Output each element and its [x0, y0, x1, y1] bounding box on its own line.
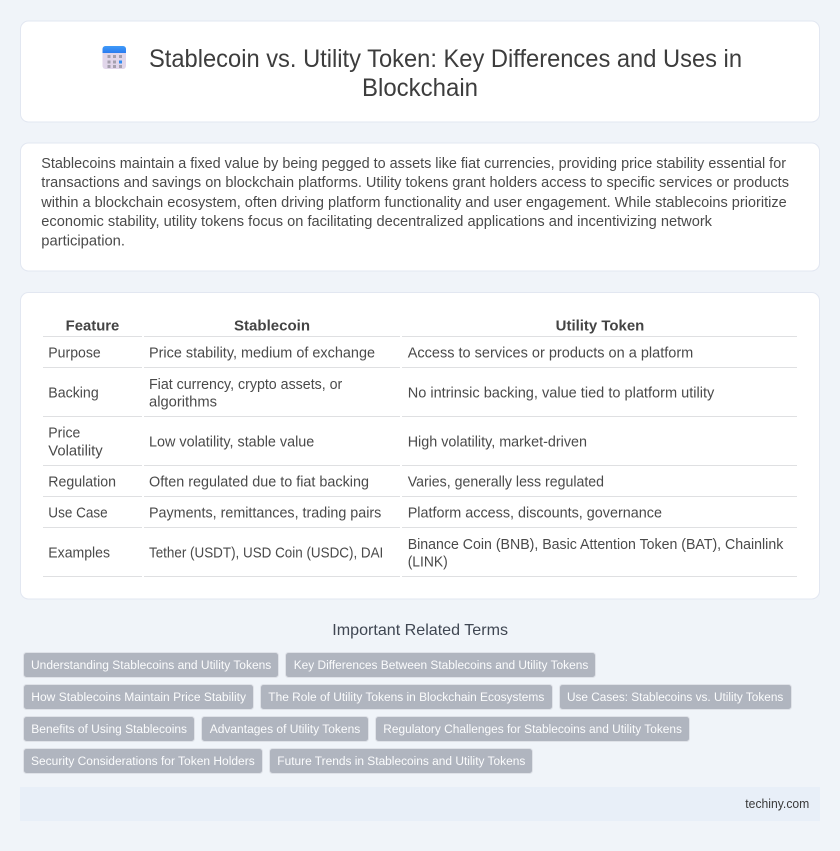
row: price volatility: Price: [48, 426, 80, 442]
row: regulation: Varies, generally less regulated: [408, 475, 604, 491]
row: backing: algorithms: [149, 395, 217, 411]
row: price volatility: [48, 426, 587, 460]
icon: calendar grid: [102, 46, 126, 69]
tag: Key Differences Between Stablecoins and Utility Tokens: [294, 658, 588, 672]
row: use case: Payments, remittances, trading pairs: [149, 506, 381, 522]
tag: [560, 684, 792, 710]
row: backing: Fiat currency, crypto assets, or: [149, 377, 342, 393]
row: regulation: Regulation: [48, 475, 116, 491]
panel: comparison table: [20, 292, 820, 599]
row: regulation: [48, 475, 604, 491]
row: price volatility: Volatility: [48, 444, 103, 460]
row: purpose: [48, 346, 693, 362]
tag: Advantages of Utility Tokens: [210, 722, 360, 736]
panel: introduction text: economic stability, utility tokens focus on facilitating decentralized applications and incentivizing network: [41, 214, 713, 230]
row: backing: Backing: [48, 386, 99, 402]
footer: techiny.com: [745, 797, 809, 811]
panel: introduction text: participation.: [41, 234, 125, 250]
tag: How Stablecoins Maintain Price Stability: [31, 690, 247, 704]
row: use case: Platform access, discounts, governance: [408, 506, 662, 522]
tag: [24, 652, 278, 678]
row: examples: Binance Coin (BNB), Basic Attention Token (BAT), Chainlink: [408, 537, 784, 553]
panel: introduction text: Stablecoins maintain a fixed value by being pegged to assets like fiat currencies, providing price stability essential for: [41, 156, 786, 172]
tag: [260, 684, 552, 710]
row: examples: Tether (USDT), USD Coin (USDC), DAI: [149, 546, 383, 562]
related term tags: [24, 652, 792, 774]
tag: Security Considerations for Token Holders: [31, 754, 255, 768]
table header row: Stablecoin: [234, 319, 310, 335]
title: Blockchain: [362, 74, 478, 102]
row: backing: No intrinsic backing, value tied to platform utility: [408, 386, 715, 402]
tag: [286, 652, 596, 678]
title: [149, 45, 742, 102]
tag: Regulatory Challenges for Stablecoins and Utility Tokens: [383, 722, 682, 736]
tag: [270, 748, 532, 774]
panel: introduction text: within a blockchain ecosystem, often driving platform functionality and user engagement. While stablecoins prioritize: [40, 195, 787, 211]
tag: [24, 748, 262, 774]
tag: Use Cases: Stablecoins vs. Utility Tokens: [567, 690, 783, 704]
tag: [202, 716, 368, 742]
panel: introduction text: [20, 143, 820, 271]
row: backing: [48, 377, 715, 411]
tag: Future Trends in Stablecoins and Utility Tokens: [277, 754, 525, 768]
row: purpose: Price stability, medium of exchange: [149, 346, 375, 362]
table header row: Feature: [66, 319, 119, 335]
tag: Understanding Stablecoins and Utility Tokens: [31, 658, 271, 672]
tag: [24, 684, 254, 710]
row: examples: Examples: [48, 546, 110, 562]
row: regulation: Often regulated due to fiat backing: [149, 475, 369, 491]
tag: The Role of Utility Tokens in Blockchain Ecosystems: [268, 690, 544, 704]
panel: introduction text: transactions and savings on blockchain platforms. Utility tokens grant holders access to specific services or products: [41, 175, 789, 191]
row: purpose: Purpose: [48, 346, 101, 362]
tag: Benefits of Using Stablecoins: [31, 722, 187, 736]
title: Stablecoin vs. Utility Token: Key Differences and Uses in: [149, 45, 742, 73]
tag: [24, 716, 194, 742]
table header row: [66, 319, 644, 335]
row: use case: Use Case: [48, 506, 108, 522]
row: price volatility: High volatility, market-driven: [408, 435, 587, 451]
row: purpose: Access to services or products on a platform: [408, 346, 693, 362]
footer: [20, 787, 820, 821]
panel: header: [20, 21, 820, 122]
table header row: Utility Token: [556, 319, 644, 335]
row: price volatility: Low volatility, stable value: [149, 435, 314, 451]
tag: [376, 716, 690, 742]
heading: important related terms: Important Related Terms: [332, 622, 508, 639]
row: examples: [48, 537, 784, 571]
row: examples: (LINK): [408, 555, 448, 571]
row: use case: [48, 506, 662, 522]
